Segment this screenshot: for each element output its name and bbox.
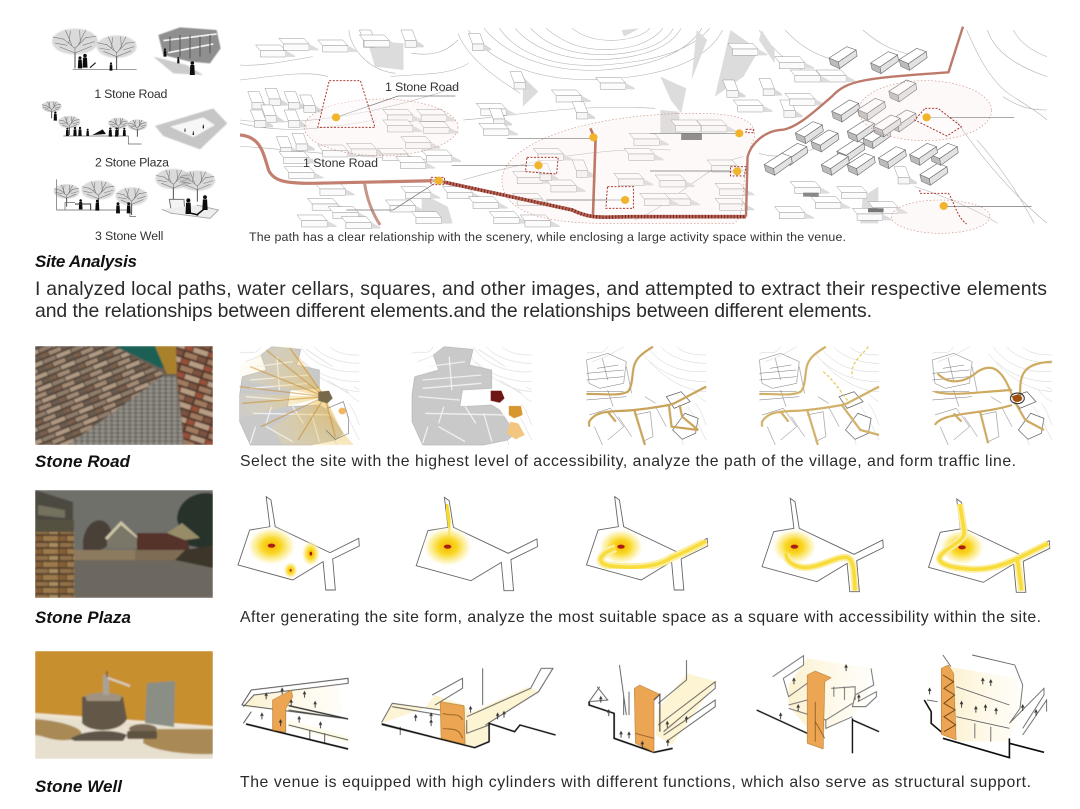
photo: stone well (35, 651, 213, 759)
contours and terrain (240, 28, 1047, 223)
diagram: section four (757, 656, 879, 753)
diagram: plaza hot spots (238, 497, 359, 590)
sketch: plaza section (42, 101, 147, 144)
paragraph: site analysis description: I analyzed local paths, water cellars, squares, and other images, and attempted to extract their respective elements (35, 278, 1047, 300)
label: 1 Stone Road: 1 Stone Road (94, 87, 167, 101)
row: stone well section diagrams (242, 655, 1047, 758)
row: stone road diagrams (240, 347, 1052, 445)
map: village axonometric with paths (240, 27, 1047, 233)
path: main road (240, 27, 963, 225)
map caption: The path has a clear relationship with the scenery, while enclosing a large activity space within the venue. (249, 230, 846, 244)
yellow activity dots (332, 113, 948, 210)
caption: stone road: Select the site with the highest level of accessibility, analyze the path of the village, and form traffic line. (240, 453, 1016, 470)
label: 2 Stone Plaza: 2 Stone Plaza (95, 156, 169, 170)
diagram: plaza with all paths (929, 499, 1050, 592)
sketch: well section (54, 179, 148, 217)
caption: stone well: The venue is equipped with high cylinders with different functions, which also serve as structural support. (240, 774, 1031, 791)
heading: Site Analysis: Site Analysis (35, 252, 137, 271)
sketch: road terrace (153, 27, 221, 75)
diagram: section five (924, 655, 1047, 758)
buildings: dense iso cluster (764, 47, 958, 185)
label: Stone Plaza: Stone Plaza (35, 608, 131, 627)
activity range ellipses (304, 81, 992, 233)
row: stone plaza diagrams (238, 497, 1050, 592)
terrain shadows (367, 28, 878, 223)
label: 3 Stone Well: 3 Stone Well (95, 229, 163, 243)
map label: 1 Stone Road upper: 1 Stone Road (385, 80, 459, 94)
caption: stone plaza: After generating the site form, analyze the most suitable space as a square with accessibility within the site. (240, 609, 1041, 626)
red dashed site outlines (318, 81, 967, 224)
diagram: plaza with east path (586, 497, 708, 590)
diagram: site selection blocks (412, 347, 532, 445)
paragraph: site analysis description: and the relationships between different elements.and the relationships between different elements. (35, 300, 872, 322)
photo: stone plaza (35, 490, 213, 598)
sketch: plaza aerial (155, 108, 227, 149)
diagram: section one (242, 678, 348, 749)
diagram: final traffic line (932, 347, 1052, 445)
diagram: section three (589, 660, 717, 752)
diagram: plaza with south path (762, 498, 883, 592)
diagram: plaza with north path (416, 497, 537, 591)
photo: stone road (35, 346, 213, 445)
map label: 1 Stone Road lower: 1 Stone Road (303, 156, 378, 170)
sketch: well bench (155, 169, 218, 218)
leader lines (336, 96, 1031, 210)
sketch: road section with trees (52, 28, 137, 71)
diagram: section two (382, 668, 556, 748)
buildings: low-rise blocks (248, 30, 917, 229)
diagram: accessibility sight lines (240, 347, 359, 445)
diagram: main paths (586, 347, 706, 445)
panel: site analysis scene sketches (42, 27, 227, 243)
label: Stone Well: Stone Well (35, 777, 123, 796)
diagram: secondary paths (759, 347, 879, 445)
label: Stone Road: Stone Road (35, 452, 131, 471)
